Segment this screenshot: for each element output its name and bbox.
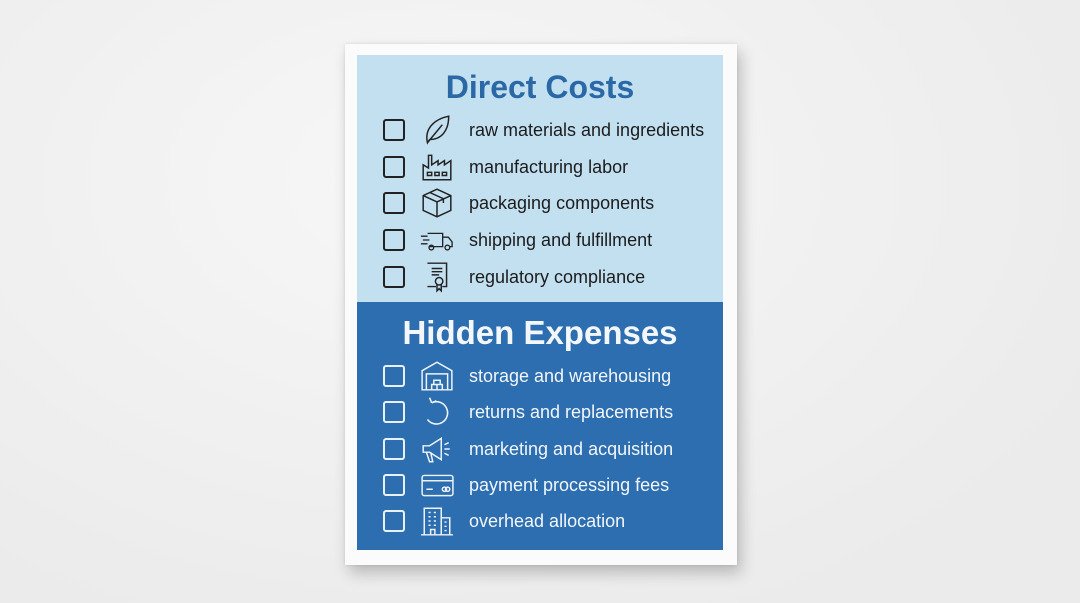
item: packaging: packaging components [469,193,654,213]
paper sheet [345,44,737,565]
item: manufacturing labor [383,154,628,180]
item: shipping [383,229,652,251]
item: raw materials [383,115,704,144]
heading: Direct Costs: Direct Costs [446,69,634,105]
item: raw materials: raw materials and ingredients [469,120,704,140]
item: overhead [383,508,625,536]
item: storage [383,361,671,390]
item: storage: storage and warehousing [469,366,671,386]
item: marketing: marketing and acquisition [469,439,673,459]
panel: direct costs [357,55,723,302]
item: returns [383,397,673,425]
item: returns: returns and replacements [469,402,673,422]
item: packaging [383,188,654,218]
item: marketing [383,437,673,462]
item: shipping: shipping and fulfillment [469,230,652,250]
item: manufacturing labor: manufacturing labor [469,157,628,177]
heading: Hidden Expenses: Hidden Expenses [402,314,678,351]
item: regulatory: regulatory compliance [469,267,645,287]
item: payment: payment processing fees [469,475,669,495]
item: overhead: overhead allocation [469,511,625,531]
item: regulatory [383,262,645,292]
panel: hidden expenses [357,302,723,550]
item: payment [383,474,669,496]
